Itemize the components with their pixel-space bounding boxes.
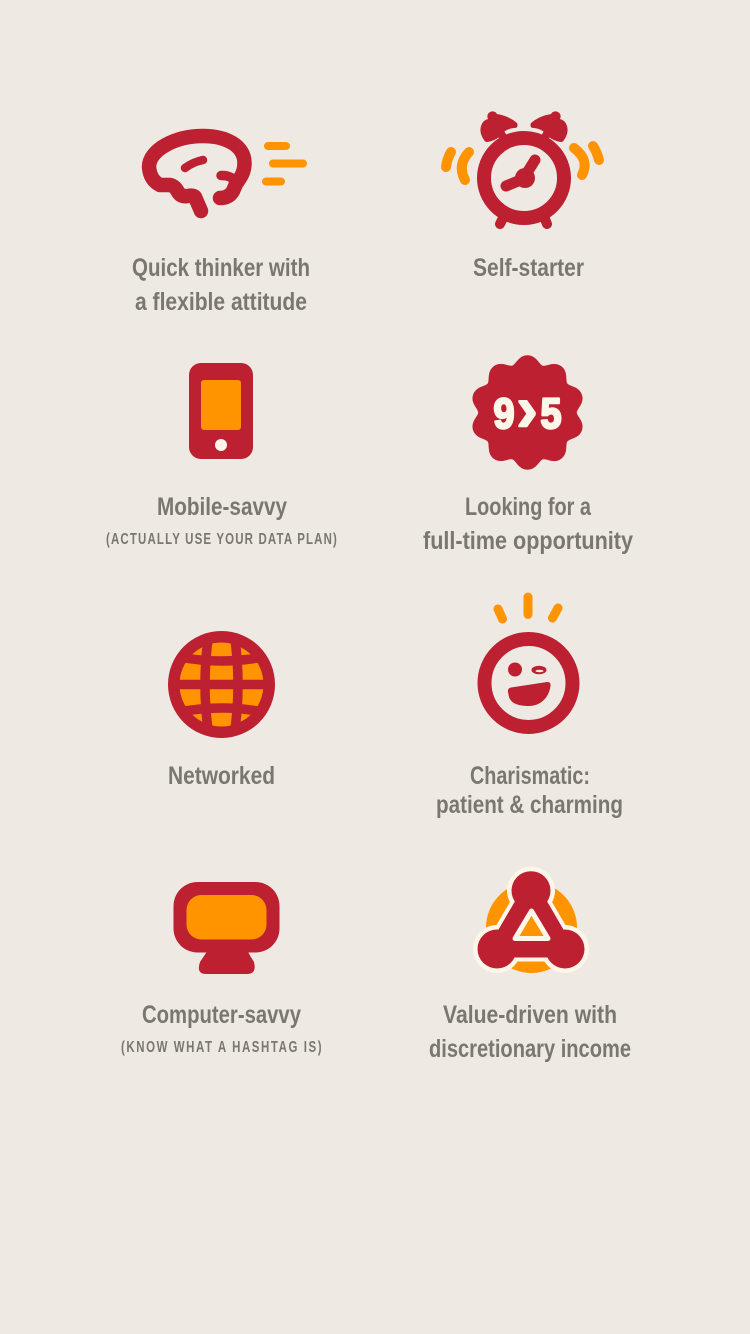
icon: ringing alarm clock [446, 111, 599, 224]
panel: quick thinker [132, 136, 310, 316]
panel: charismatic [436, 597, 623, 819]
label: self-starter: Self-starter [473, 254, 584, 282]
label: mobile-savvy [106, 493, 337, 547]
panel: networked [168, 631, 275, 790]
icon: smartphone [189, 363, 253, 459]
label: networked: Networked [168, 762, 275, 790]
label: full-time: Looking for a [465, 493, 592, 521]
label: computer-savvy: Computer-savvy [142, 1001, 301, 1029]
label: computer-savvy [121, 1001, 322, 1055]
icon: monitor [174, 882, 280, 974]
label: full-time: full-time opportunity [423, 527, 633, 555]
icon: brain with speed lines [149, 136, 303, 211]
panel: value-driven [429, 867, 631, 1063]
label: value-driven: discretionary income [429, 1035, 631, 1063]
icon: 9>5 badge: 5 [540, 390, 562, 438]
icon: 9>5 badge [463, 347, 592, 478]
label: mobile-savvy: Mobile-savvy [157, 493, 287, 521]
label: full-time [423, 493, 633, 555]
panel: full-time [423, 347, 633, 555]
label: value-driven [429, 1001, 631, 1063]
label: charismatic: patient & charming [436, 791, 623, 819]
label: charismatic [436, 762, 623, 819]
icon: globe [168, 631, 275, 738]
icon: 9>5 badge: › [516, 371, 538, 445]
panel: self-starter [446, 111, 599, 282]
icon: triangle network [473, 867, 589, 973]
label: charismatic: Charismatic: [470, 762, 590, 790]
icon: winking smiley with rays [484, 597, 572, 727]
label: quick thinker: Quick thinker with [132, 254, 310, 282]
panel: mobile-savvy [106, 363, 337, 547]
label: mobile-savvy: (ACTUALLY USE YOUR DATA PLAN) [106, 530, 337, 547]
label: value-driven: Value-driven with [443, 1001, 617, 1029]
icon: 9>5 badge: 9 [494, 390, 514, 438]
label: computer-savvy: (KNOW WHAT A HASHTAG IS) [121, 1038, 322, 1055]
label: quick thinker: a flexible attitude [135, 288, 307, 316]
panel: computer-savvy [121, 882, 322, 1055]
label: quick thinker [132, 254, 310, 316]
